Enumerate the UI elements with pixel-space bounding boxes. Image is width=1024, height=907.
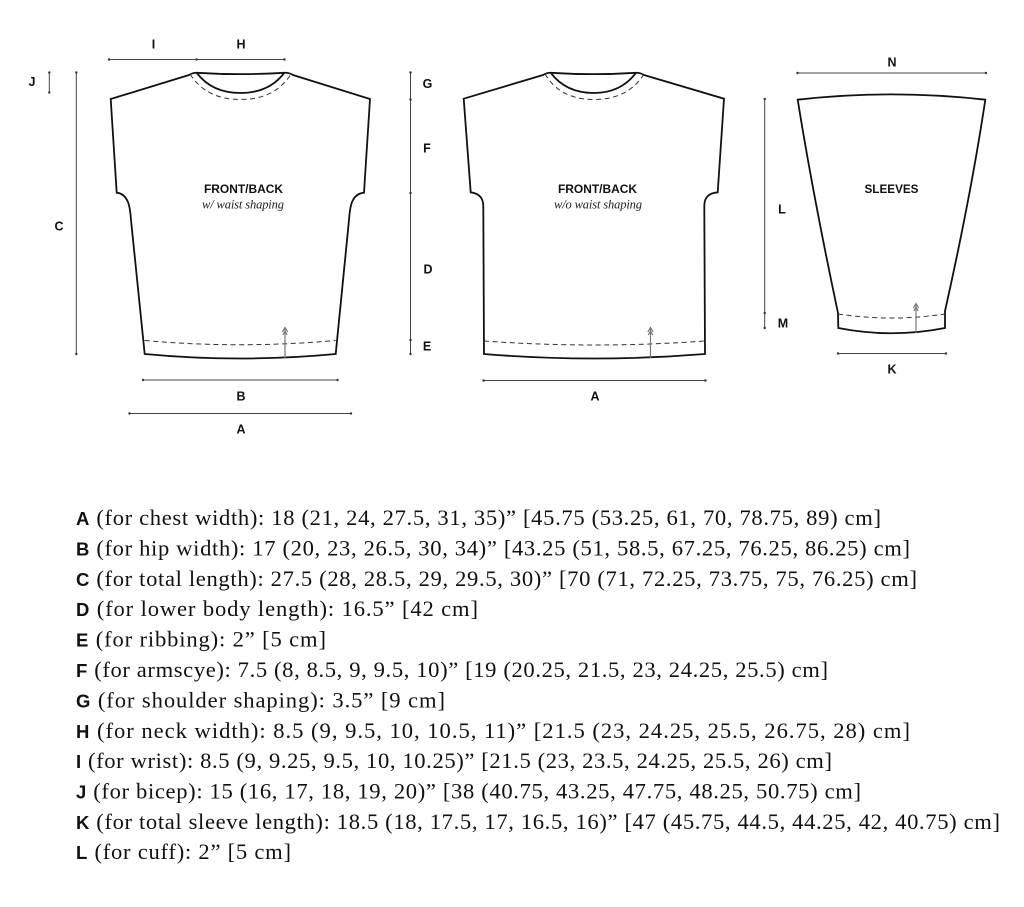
measure L and M: L (778, 202, 786, 216)
measure C: C (54, 220, 64, 234)
panel subtitle: w/o waist shaping (554, 198, 642, 212)
measure stack G F D E: G (423, 77, 432, 91)
measure I: I (152, 38, 155, 52)
line K: K (for total sleeve length): 18.5 (18, 17.5, 17, 16.5, 16)” [47 (45.75, 44.5, 44.25, 42, 40.75) cm] (76, 809, 1000, 834)
measure H: H (236, 38, 246, 52)
schematic: front/back without waist shaping (464, 73, 724, 404)
panel subtitle: w/ waist shaping (202, 198, 284, 212)
garment outline (111, 73, 370, 359)
measure I (108, 38, 198, 61)
grain arrow (648, 328, 653, 358)
measure stack G F D E (409, 71, 433, 355)
measure K: K (887, 362, 897, 376)
schematic: sleeves (764, 56, 987, 376)
line A: A (for chest width): 18 (21, 24, 27.5, 31, 35)” [45.75 (53.25, 61, 70, 78.75, 89) cm] (76, 505, 881, 530)
line H: H (for neck width): 8.5 (9, 9.5, 10, 10.5, 11)” [21.5 (23, 24.25, 25.5, 26.75, 28) cm] (76, 718, 910, 743)
neck ribbing dashed line (545, 74, 644, 100)
measure L and M (764, 98, 788, 330)
line E: E (for ribbing): 2” [5 cm] (76, 627, 326, 652)
measure J: J (29, 75, 36, 89)
measure A left: A (236, 422, 246, 436)
measure stack G F D E: E (423, 340, 431, 354)
cuff dashed line (838, 314, 945, 318)
line G: G (for shoulder shaping): 3.5” [9 cm] (76, 687, 445, 712)
line F: F (for armscye): 7.5 (8, 8.5, 9, 9.5, 10)” [19 (20.25, 21.5, 23, 24.25, 25.5) cm] (76, 657, 828, 682)
hem ribbing dashed line (145, 340, 336, 345)
hem ribbing dashed line (484, 341, 705, 345)
measure B: B (236, 390, 246, 404)
line L: L (for cuff): 2” [5 cm] (76, 839, 291, 864)
neckline (551, 73, 636, 93)
measure K (837, 352, 947, 376)
grain arrow (913, 304, 919, 333)
line C: C (for total length): 27.5 (28, 28.5, 29, 29.5, 30)” [70 (71, 72.25, 73.75, 75, 76.25) cm] (76, 566, 917, 591)
panel title: FRONT/BACK (558, 182, 637, 196)
measure N: N (887, 56, 897, 70)
measure A centre: A (590, 390, 600, 404)
sleeve outline (798, 94, 985, 333)
measurements for left schematic (29, 38, 433, 436)
neck ribbing dashed line (190, 74, 291, 100)
measurement list (76, 505, 1000, 864)
line D: D (for lower body length): 16.5” [42 cm] (76, 596, 478, 621)
line B: B (for hip width): 17 (20, 23, 26.5, 30, 34)” [43.25 (51, 58.5, 67.25, 76.25, 86.25) cm] (76, 535, 910, 560)
measure stack G F D E: F (423, 142, 431, 156)
grain arrow (282, 328, 288, 358)
line I: I (for wrist): 8.5 (9, 9.25, 9.5, 10, 10.25)” [21.5 (23, 23.5, 24.25, 25.5, 26) cm] (76, 748, 832, 773)
panel title: FRONT/BACK (204, 182, 283, 196)
measure H (196, 38, 286, 61)
line J: J (for bicep): 15 (16, 17, 18, 19, 20)” [38 (40.75, 43.25, 47.75, 48.25, 50.75) cm] (76, 779, 861, 804)
garment outline (464, 73, 724, 359)
measure L and M: M (778, 316, 788, 330)
measure J (29, 71, 50, 94)
schematic: front/back with waist shaping (111, 73, 370, 359)
measure stack G F D E: D (423, 262, 433, 276)
panel title: SLEEVES (864, 182, 918, 196)
neckline (197, 73, 284, 93)
